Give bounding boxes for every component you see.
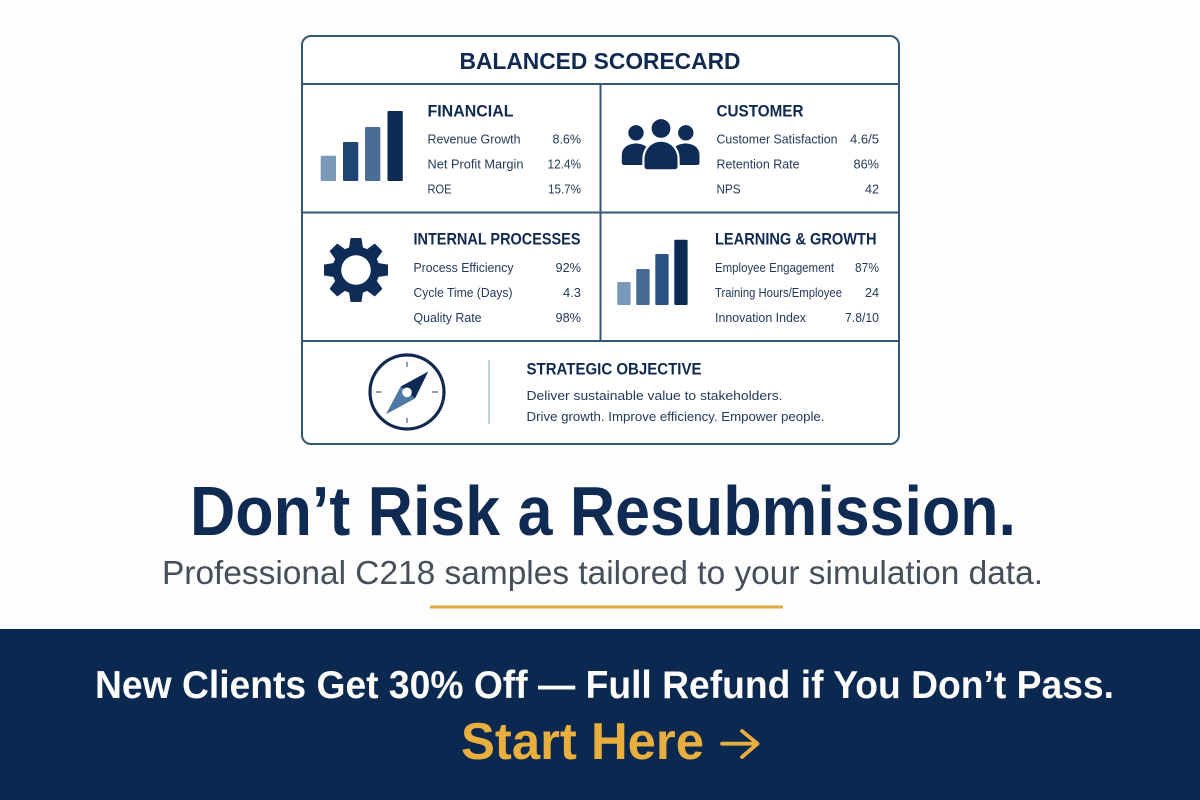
text: objective statement: Drive growth. Improve efficiency. Empower people. <box>526 409 824 424</box>
metrics: internal processes: Cycle Time (Days) <box>414 285 512 300</box>
metrics: learning and growth: 87% <box>855 260 879 275</box>
divider <box>488 360 490 424</box>
panel: internal processes <box>324 230 581 325</box>
panel: strategic objective <box>370 355 824 429</box>
subheading: Professional C218 samples tailored to your simulation data. <box>162 554 1043 591</box>
heading: internal processes: INTERNAL PROCESSES <box>414 230 580 248</box>
metrics: customer: 42 <box>865 181 879 196</box>
metrics: learning and growth: 24 <box>865 285 879 300</box>
metrics: learning and growth <box>715 260 879 325</box>
panel: financial <box>321 102 581 196</box>
call to action: start here: Start Here <box>461 713 704 771</box>
icon: compass <box>370 355 444 429</box>
panel: learning and growth <box>617 230 879 325</box>
metrics: financial: 8.6% <box>552 131 581 146</box>
metrics: learning and growth: 7.8/10 <box>845 310 879 325</box>
icon: financial bar chart <box>321 111 403 181</box>
panel: call to action band <box>0 629 1200 800</box>
metrics: customer: 86% <box>854 156 879 171</box>
metrics: customer: Retention Rate <box>716 156 800 171</box>
metrics: internal processes: Process Efficiency <box>414 260 514 275</box>
metrics: internal processes: 92% <box>556 260 581 275</box>
gold accent rule <box>430 606 783 608</box>
metrics: customer <box>716 131 879 196</box>
icon: gear <box>324 238 388 302</box>
metrics: financial: Revenue Growth <box>428 131 520 146</box>
metrics: financial: 15.7% <box>548 181 581 196</box>
text: objective statement <box>526 388 824 424</box>
metrics: financial: Net Profit Margin <box>428 156 524 171</box>
metrics: financial: 12.4% <box>548 156 581 171</box>
metrics: customer: Customer Satisfaction <box>716 131 838 146</box>
offer text: New Clients Get 30% Off — Full Refund if You Don’t Pass. <box>95 664 1114 707</box>
metrics: customer: 4.6/5 <box>850 131 879 146</box>
text: objective statement: Deliver sustainable value to stakeholders. <box>526 388 782 403</box>
metrics: internal processes: 98% <box>556 310 581 325</box>
arrow <box>722 731 758 757</box>
icon: growth bar chart <box>617 240 688 305</box>
metrics: customer: NPS <box>716 181 741 196</box>
metrics: internal processes: 4.3 <box>563 285 581 300</box>
heading: financial: FINANCIAL <box>428 102 514 120</box>
metrics: learning and growth: Training Hours/Employee <box>715 285 842 300</box>
heading: strategic objective: STRATEGIC OBJECTIVE <box>526 360 702 378</box>
heading: customer: CUSTOMER <box>716 102 804 120</box>
metrics: financial <box>428 131 581 196</box>
icon: people group <box>622 119 700 169</box>
metrics: financial: ROE <box>428 181 452 196</box>
metrics: learning and growth: Innovation Index <box>715 310 806 325</box>
panel: balanced scorecard card <box>302 36 899 444</box>
panel: customer <box>622 102 879 196</box>
metrics: internal processes <box>414 260 581 325</box>
heading: balanced scorecard: BALANCED SCORECARD <box>460 48 740 74</box>
heading: learning and growth: LEARNING & GROWTH <box>715 230 876 248</box>
metrics: learning and growth: Employee Engagement <box>715 260 834 275</box>
metrics: internal processes: Quality Rate <box>414 310 482 325</box>
headline: Don’t Risk a Resubmission. <box>190 472 1016 550</box>
